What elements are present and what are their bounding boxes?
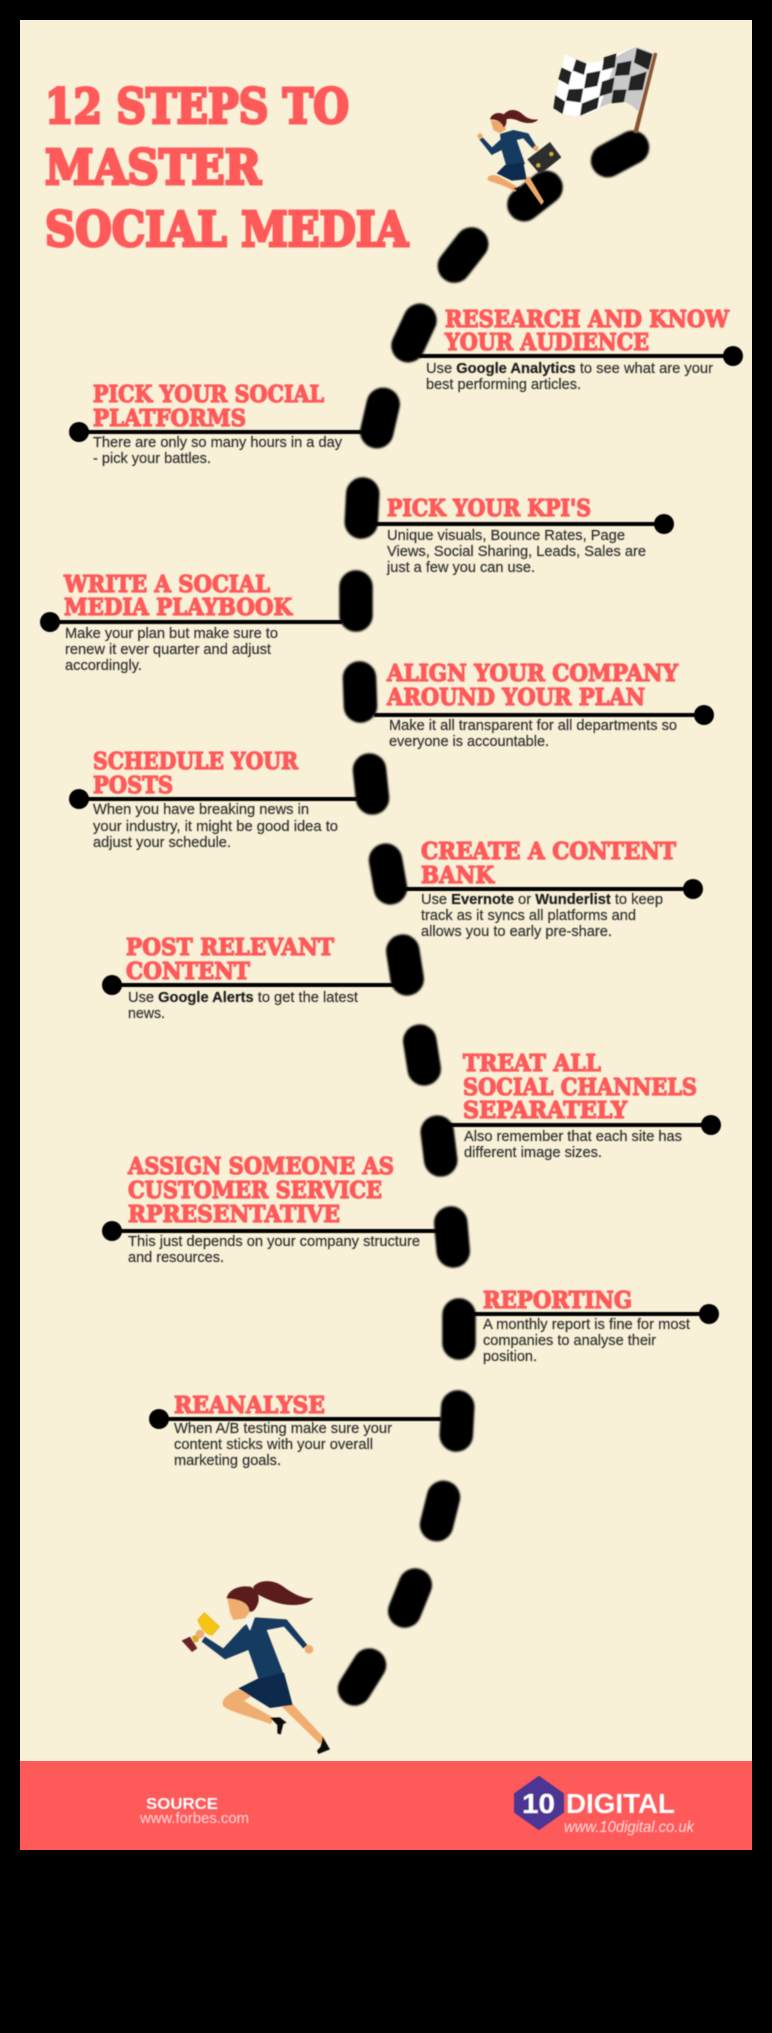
connector line and dot bbox=[374, 514, 674, 534]
description: adjust your schedule. bbox=[93, 834, 231, 851]
heading: ASSIGN SOMEONE AS bbox=[127, 1153, 394, 1180]
logo: 10 Digital: www.10digital.co.uk bbox=[564, 1819, 695, 1836]
heading: POSTS bbox=[93, 772, 173, 799]
source credit bbox=[139, 1796, 249, 1827]
step 1: research and know your audience bbox=[419, 306, 743, 393]
source credit: SOURCE bbox=[146, 1796, 218, 1813]
step 8: post relevant content bbox=[102, 934, 394, 1022]
connector line and dot bbox=[404, 879, 703, 899]
description: everyone is accountable. bbox=[389, 733, 549, 750]
heading bbox=[421, 838, 676, 889]
description bbox=[65, 625, 278, 674]
step 4: write a social media playbook bbox=[40, 571, 342, 674]
heading bbox=[127, 1153, 394, 1228]
description: position. bbox=[483, 1348, 537, 1365]
heading: SCHEDULE YOUR bbox=[93, 748, 299, 775]
heading bbox=[93, 748, 299, 799]
title: SOCIAL MEDIA bbox=[45, 202, 409, 258]
heading bbox=[386, 660, 679, 711]
heading: BANK bbox=[421, 862, 495, 889]
heading: CONTENT bbox=[126, 958, 250, 985]
description: just a few you can use. bbox=[386, 559, 535, 576]
step 12: reanalyse bbox=[149, 1392, 441, 1469]
step 6: schedule your posts bbox=[69, 748, 357, 851]
heading bbox=[126, 934, 334, 985]
description: companies to analyse their bbox=[483, 1332, 656, 1349]
connector line and dot bbox=[40, 612, 342, 632]
description bbox=[128, 1233, 420, 1266]
heading: SOCIAL CHANNELS bbox=[463, 1074, 697, 1101]
heading: CUSTOMER SERVICE bbox=[128, 1177, 382, 1204]
logo: 10 Digital bbox=[515, 1777, 695, 1836]
icon: checkered flag bbox=[553, 47, 657, 133]
heading bbox=[93, 381, 324, 432]
description: - pick your battles. bbox=[93, 450, 211, 467]
connector line and dot bbox=[473, 1304, 719, 1324]
heading: WRITE A SOCIAL bbox=[63, 571, 270, 598]
description: allows you to early pre-share. bbox=[421, 923, 612, 940]
heading: YOUR AUDIENCE bbox=[444, 329, 649, 356]
heading: PICK YOUR KPI'S bbox=[387, 495, 591, 522]
connector line and dot bbox=[102, 1221, 437, 1241]
heading: POST RELEVANT bbox=[126, 934, 334, 961]
description: different image sizes. bbox=[464, 1144, 602, 1161]
description: A monthly report is fine for most bbox=[483, 1316, 691, 1333]
description: Use Google Alerts to get the latest bbox=[128, 989, 359, 1006]
description: There are only so many hours in a day bbox=[93, 434, 342, 451]
heading: RESEARCH AND KNOW bbox=[445, 306, 730, 333]
description: news. bbox=[128, 1005, 165, 1022]
heading: ALIGN YOUR COMPANY bbox=[386, 660, 679, 687]
description: Views, Social Sharing, Leads, Sales are bbox=[387, 543, 646, 560]
description: track as it syncs all platforms and bbox=[421, 907, 636, 924]
heading: PICK YOUR SOCIAL bbox=[93, 381, 324, 408]
description bbox=[93, 801, 338, 851]
heading: AROUND YOUR PLAN bbox=[386, 684, 645, 711]
description: Also remember that each site has bbox=[464, 1128, 682, 1145]
description bbox=[426, 360, 713, 393]
description bbox=[464, 1128, 682, 1161]
connector line and dot bbox=[374, 705, 714, 725]
heading bbox=[444, 306, 730, 356]
heading bbox=[463, 1050, 697, 1124]
step 5: align your company around your plan bbox=[374, 660, 714, 750]
title: 12 STEPS TO bbox=[45, 79, 349, 135]
description: When you have breaking news in bbox=[93, 801, 309, 818]
footprint trail bbox=[334, 127, 653, 1710]
heading: REANALYSE bbox=[174, 1392, 325, 1419]
footer band bbox=[20, 1761, 752, 1850]
connector line and dot bbox=[448, 1115, 721, 1135]
logo: 10 Digital: 10 bbox=[522, 1788, 555, 1819]
description bbox=[386, 527, 646, 576]
description bbox=[483, 1316, 691, 1365]
description: Use Google Analytics to see what are your bbox=[426, 360, 713, 377]
description: When A/B testing make sure your bbox=[174, 1420, 392, 1437]
description: renew it ever quarter and adjust bbox=[65, 641, 272, 658]
description: Unique visuals, Bounce Rates, Page bbox=[387, 527, 625, 544]
description: This just depends on your company structure bbox=[128, 1233, 420, 1250]
description: accordingly. bbox=[65, 657, 142, 674]
description: Use Evernote or Wunderlist to keep bbox=[421, 891, 663, 908]
heading: MEDIA PLAYBOOK bbox=[64, 594, 293, 621]
heading: CREATE A CONTENT bbox=[421, 838, 676, 865]
description: your industry, it might be good idea to bbox=[93, 818, 338, 835]
logo: 10 Digital: DIGITAL bbox=[566, 1788, 675, 1819]
description: Make it all transparent for all departments so bbox=[389, 717, 677, 734]
connector line and dot bbox=[102, 975, 394, 995]
heading: PLATFORMS bbox=[93, 405, 246, 432]
heading: REPORTING bbox=[483, 1287, 632, 1314]
step 2: pick your social platforms bbox=[69, 381, 362, 467]
step 11: reporting bbox=[473, 1287, 719, 1365]
icon: running woman with trophy bbox=[182, 1581, 330, 1754]
step 3: pick your KPIs bbox=[374, 495, 674, 576]
connector line and dot bbox=[149, 1409, 441, 1429]
description bbox=[421, 891, 663, 940]
icon: purple hexagon bbox=[515, 1777, 563, 1829]
description bbox=[389, 717, 677, 750]
step 10: assign someone as customer service representative bbox=[102, 1153, 437, 1266]
description: and resources. bbox=[128, 1249, 224, 1266]
description: Make your plan but make sure to bbox=[65, 625, 278, 642]
connector line and dot bbox=[69, 789, 357, 809]
step 7: create a content bank bbox=[404, 838, 703, 940]
description bbox=[128, 989, 359, 1022]
source credit: www.forbes.com bbox=[139, 1810, 249, 1827]
description: best performing articles. bbox=[426, 376, 581, 393]
description: marketing goals. bbox=[174, 1452, 281, 1469]
connector line and dot bbox=[69, 422, 362, 442]
description bbox=[93, 434, 342, 467]
step 9: treat all social channels separately bbox=[448, 1050, 721, 1161]
icon: small running woman with briefcase bbox=[477, 110, 561, 205]
connector line and dot bbox=[419, 346, 743, 366]
heading: RPRESENTATIVE bbox=[128, 1201, 340, 1228]
description bbox=[174, 1420, 392, 1469]
title: MASTER bbox=[45, 140, 262, 196]
heading bbox=[63, 571, 293, 621]
description: content sticks with your overall bbox=[174, 1436, 373, 1453]
heading: TREAT ALL bbox=[463, 1050, 601, 1077]
title bbox=[45, 79, 409, 258]
heading: SEPARATELY bbox=[463, 1097, 628, 1124]
